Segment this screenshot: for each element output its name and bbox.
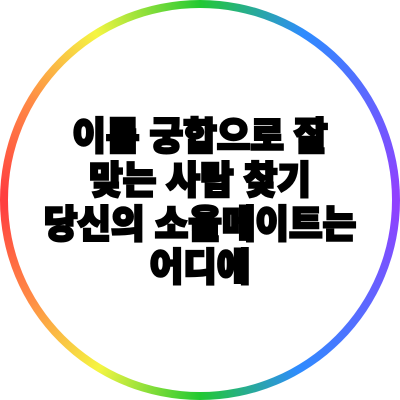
title line 3: 당신의 소울메이트는 xyxy=(44,203,356,246)
title line 2: 맞는 사람 찾기 xyxy=(89,159,311,202)
title line 4: 어디에 xyxy=(150,246,250,289)
title line 1: 이름 궁합으로 잘 xyxy=(72,115,328,158)
